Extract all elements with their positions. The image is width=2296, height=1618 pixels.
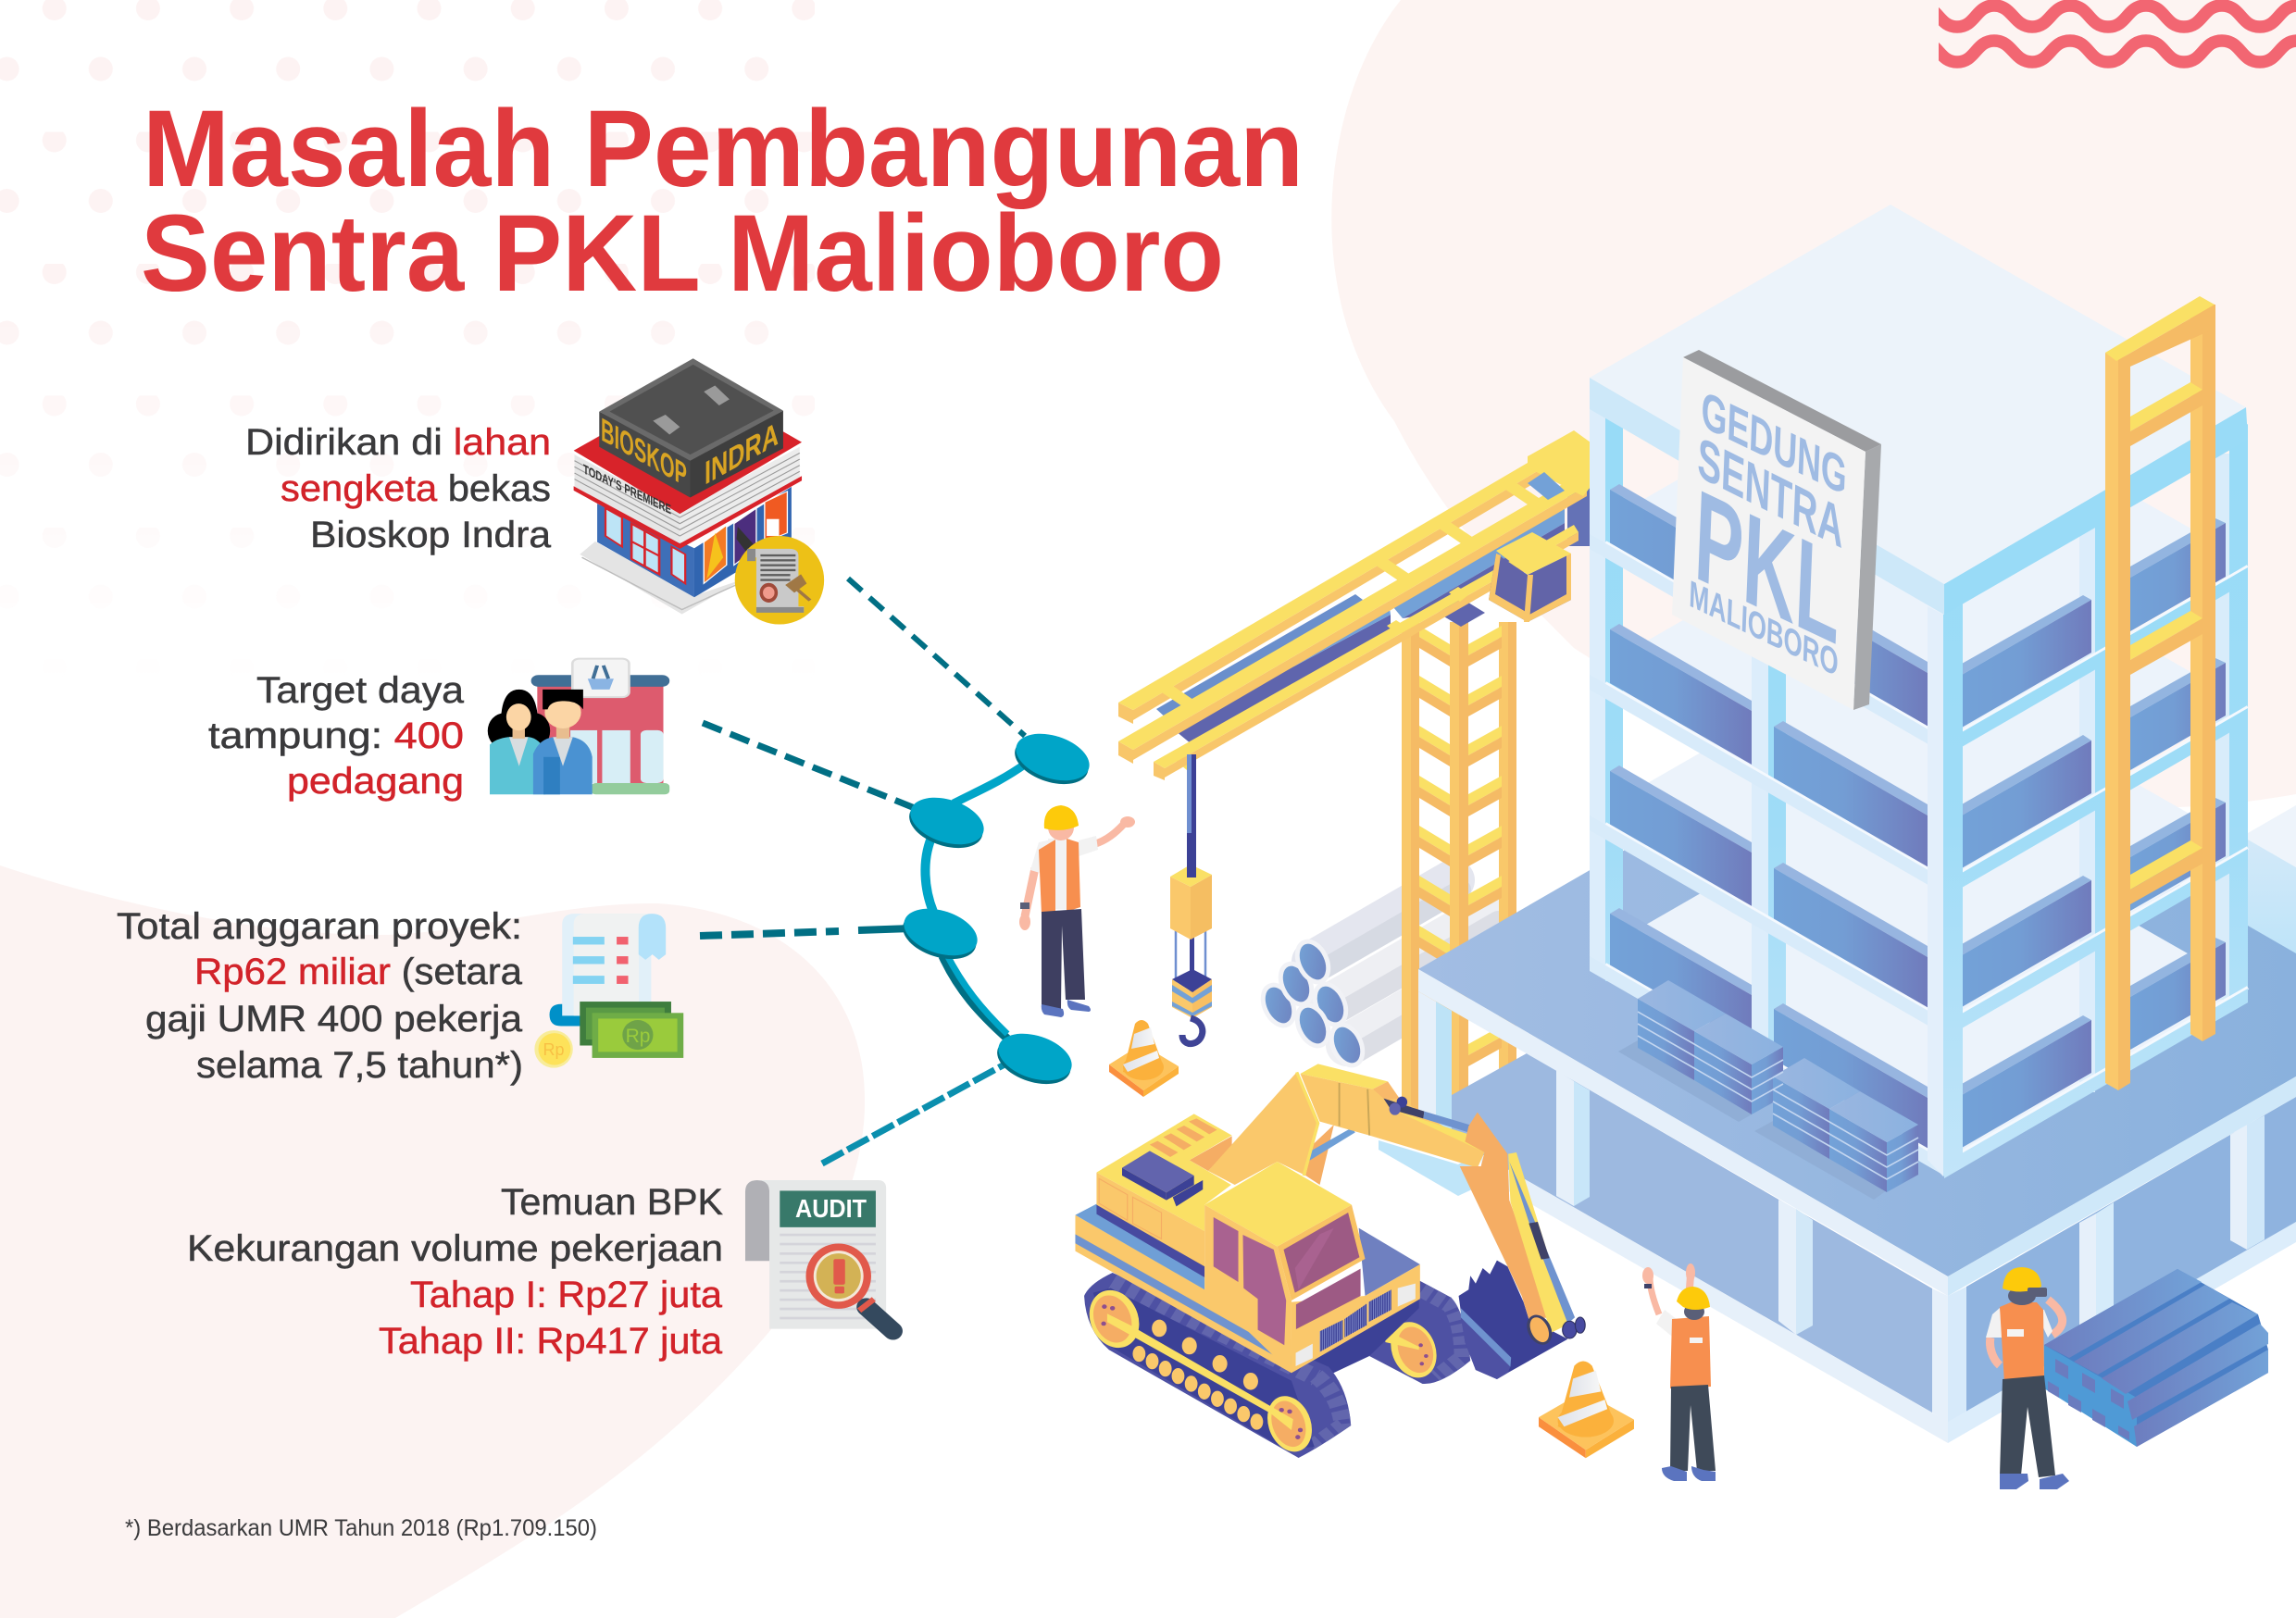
sign text: PKL <box>1692 461 1842 672</box>
title: Masalah Pembangunan <box>143 88 1304 210</box>
text block: temuan BPK: Tahap I: Rp27 juta <box>410 1275 723 1315</box>
icon: Bioskop Indra building: TODAY'S PREMIERE <box>583 463 671 517</box>
dashed line 1 <box>848 579 1025 736</box>
text block: temuan BPK: Kekurangan volume pekerjaan <box>187 1228 723 1269</box>
icon: legal document badge <box>735 536 824 625</box>
node 1 <box>1009 725 1095 792</box>
ladder rungs <box>2130 382 2202 904</box>
lower wall left <box>1452 1053 1932 1413</box>
material stacks on platform <box>1618 980 1918 1200</box>
text block: temuan BPK: Temuan BPK <box>501 1182 723 1223</box>
tower rungs <box>1419 626 1502 1066</box>
icon: receipt and money <box>534 914 683 1068</box>
text block: target daya tampung <box>208 670 465 802</box>
title <box>141 88 1304 315</box>
footnote: *) Berdasarkan UMR Tahun 2018 (Rp1.709.150) <box>125 1515 597 1541</box>
rear strut <box>1305 1125 1334 1185</box>
building lower storey <box>1379 707 2296 1443</box>
text block: bioskop: Didirikan di lahan <box>245 422 551 463</box>
text block: bioskop: sengketa bekas <box>281 468 551 509</box>
stacked pipes <box>1257 880 1518 1070</box>
head lights <box>1398 1284 1416 1307</box>
deck <box>1075 1204 1292 1373</box>
lower columns <box>1418 991 2265 1423</box>
roof fascia <box>1590 378 1944 615</box>
grille <box>1320 1289 1391 1352</box>
text block: total anggaran: Total anggaran proyek: <box>117 906 522 947</box>
node 4 <box>992 1025 1078 1092</box>
floor beams <box>1590 534 2248 1178</box>
text block: target daya tampung: pedagang <box>287 761 464 802</box>
dashed line 2 <box>703 723 915 808</box>
floor plates <box>1590 357 2246 1164</box>
track rollers <box>1132 1320 1263 1430</box>
icon: Bioskop Indra building: BIOSKOP <box>601 410 687 494</box>
platform top <box>1418 707 2296 1276</box>
boom rails <box>1118 430 1591 780</box>
left corner base <box>1379 1140 1472 1196</box>
node 2 <box>904 789 990 856</box>
timeline connector: dashed lines and nodes <box>700 579 1095 1164</box>
node 3 <box>897 900 983 967</box>
front track <box>1082 1273 1429 1458</box>
bucket <box>1459 1261 1567 1379</box>
text block: total anggaran <box>117 906 523 1086</box>
worker 1 <box>1019 805 1135 1017</box>
text block: total anggaran: Rp62 miliar (setara <box>194 952 523 992</box>
worker 3 <box>1986 1267 2069 1489</box>
bottom slab <box>1481 1154 1948 1443</box>
under carriage <box>1292 1280 1419 1376</box>
title: Sentra PKL Malioboro <box>141 193 1224 315</box>
boom <box>1208 1064 1484 1185</box>
dot pattern <box>0 0 815 410</box>
sign text <box>1689 379 1848 684</box>
crane boom <box>1118 430 1591 780</box>
traffic cone 2 <box>1539 1362 1634 1458</box>
traffic cone 1 <box>1109 1020 1179 1097</box>
stick arm <box>1460 1113 1585 1348</box>
window panels left face <box>1610 484 1928 1149</box>
text block: total anggaran: gaji UMR 400 pekerja <box>145 999 523 1039</box>
dashed line 4 <box>822 1064 1004 1164</box>
rear track <box>1369 1280 1470 1384</box>
building main structure <box>1590 205 2248 1178</box>
front column <box>1928 604 1963 1176</box>
sign text: SENTRA <box>1696 423 1844 561</box>
hydraulic ram <box>1383 1097 1472 1133</box>
front scaffold ladder <box>2105 296 2215 1090</box>
text block: bioskop <box>245 422 552 555</box>
platform fascia <box>1418 969 1948 1296</box>
text block: bioskop: Bioskop Indra <box>310 515 552 555</box>
icon: Bioskop Indra building <box>574 358 802 615</box>
text block: temuan BPK: Tahap II: Rp417 juta <box>379 1321 723 1362</box>
steel beam stack <box>2044 1269 2268 1447</box>
text block: target daya tampung: tampung: 400 <box>208 716 464 756</box>
icon: traders in front of store <box>488 659 669 794</box>
text block: temuan BPK <box>187 1182 723 1362</box>
excavator <box>1075 1064 1585 1458</box>
sign text: GEDUNG <box>1701 379 1848 507</box>
sign board <box>1672 350 1881 710</box>
window panels right face <box>1962 518 2226 1148</box>
icon: Bioskop Indra building: INDRA <box>705 415 779 492</box>
crane tower <box>1402 622 1516 1140</box>
decorative waves <box>1919 6 2296 62</box>
rear block at right edge <box>2248 805 2296 953</box>
worker 2 <box>1642 1263 1716 1481</box>
hook and cable <box>1170 754 1212 1044</box>
icon: audit document with magnifier: AUDIT <box>795 1194 867 1223</box>
icon: receipt and money: Rp <box>626 1026 650 1047</box>
sign text: MALIOBORO <box>1689 572 1839 684</box>
text block: target daya tampung: Target daya <box>256 670 465 711</box>
curved links <box>925 838 933 912</box>
lower wall right <box>1966 1097 2296 1413</box>
upper housing <box>1096 1114 1232 1277</box>
icon: audit document with magnifier <box>745 1180 893 1331</box>
background blob: bottom left <box>0 865 865 1618</box>
dashed line 3 <box>700 931 839 936</box>
roof <box>1590 205 2246 584</box>
cab <box>1204 1162 1420 1373</box>
text block: total anggaran: selama 7,5 tahun*) <box>196 1045 523 1086</box>
columns rear <box>1590 409 2248 1092</box>
icon: receipt and money: Rp <box>543 1040 565 1059</box>
crane cab <box>1489 532 1571 622</box>
background blob: top right <box>1331 0 2296 808</box>
